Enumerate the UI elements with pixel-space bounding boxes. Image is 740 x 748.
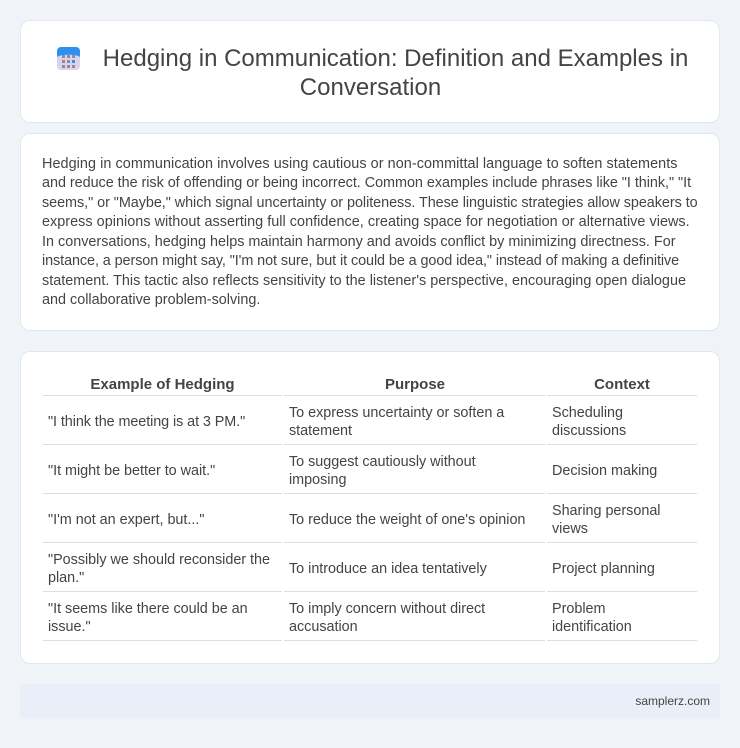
- table: Sharing personal: [552, 503, 660, 519]
- text: intro paragraph: [42, 156, 698, 308]
- text: intro paragraph: express opinions without asserting full confidence, creating space for negotiation or alternative views.: [42, 214, 690, 230]
- text: intro paragraph: statement. This tactic also reflects sensitivity to the listener's perspective, encouraging open dialogue: [42, 273, 686, 289]
- text: intro paragraph: Hedging in communication involves using cautious or non-committal language to soften statements: [42, 156, 678, 172]
- table: accusation: [289, 619, 358, 635]
- table: Context: [594, 376, 650, 393]
- panel: table: [20, 351, 720, 664]
- table: "Possibly we should reconsider the: [48, 552, 270, 568]
- table: Scheduling: [552, 405, 623, 421]
- table: discussions: [552, 423, 626, 439]
- table: "I'm not an expert, but...": [48, 512, 204, 528]
- table: Project planning: [552, 561, 655, 577]
- title: [103, 45, 688, 101]
- table: Purpose: [385, 376, 445, 393]
- footer text: samplerz.com: [635, 694, 710, 708]
- table: statement: [289, 423, 352, 439]
- table: To imply concern without direct: [289, 601, 485, 617]
- text: intro paragraph: and collaborative problem-solving.: [42, 292, 260, 308]
- text: intro paragraph: In conversations, hedging helps maintain harmony and avoids conflict by minimizing directness. For: [42, 234, 676, 250]
- table: To suggest cautiously without: [289, 454, 476, 470]
- text: intro paragraph: seems," or "Maybe," which signal uncertainty or politeness. These linguistic strategies allow speakers to: [42, 195, 698, 211]
- table: To reduce the weight of one's opinion: [289, 512, 525, 528]
- header card: [20, 20, 720, 123]
- table: issue.": [48, 619, 91, 635]
- table: views: [552, 521, 588, 537]
- table: Decision making: [552, 463, 657, 479]
- icon: calendar: [57, 47, 80, 70]
- title: Hedging in Communication: Definition and Examples in: [103, 45, 688, 72]
- text: intro paragraph: and reduce the risk of offending or being incorrect. Common examples include phrases like "I think," "It: [42, 175, 691, 191]
- table: Problem: [552, 601, 605, 617]
- table: "It might be better to wait.": [48, 463, 215, 479]
- title: Conversation: [300, 74, 441, 101]
- table: "I think the meeting is at 3 PM.": [48, 414, 245, 430]
- footer bar: [20, 684, 720, 718]
- table: identification: [552, 619, 632, 635]
- table: To introduce an idea tentatively: [289, 561, 487, 577]
- table: plan.": [48, 570, 84, 586]
- panel: intro paragraph: [20, 133, 720, 331]
- table: [43, 376, 697, 641]
- table: "It seems like there could be an: [48, 601, 248, 617]
- table: Example of Hedging: [90, 376, 235, 393]
- text: intro paragraph: instance, a person might say, "I'm not sure, but it could be a good idea," instead of making a definitive: [42, 253, 679, 269]
- table: imposing: [289, 472, 346, 488]
- table: To express uncertainty or soften a: [289, 405, 504, 421]
